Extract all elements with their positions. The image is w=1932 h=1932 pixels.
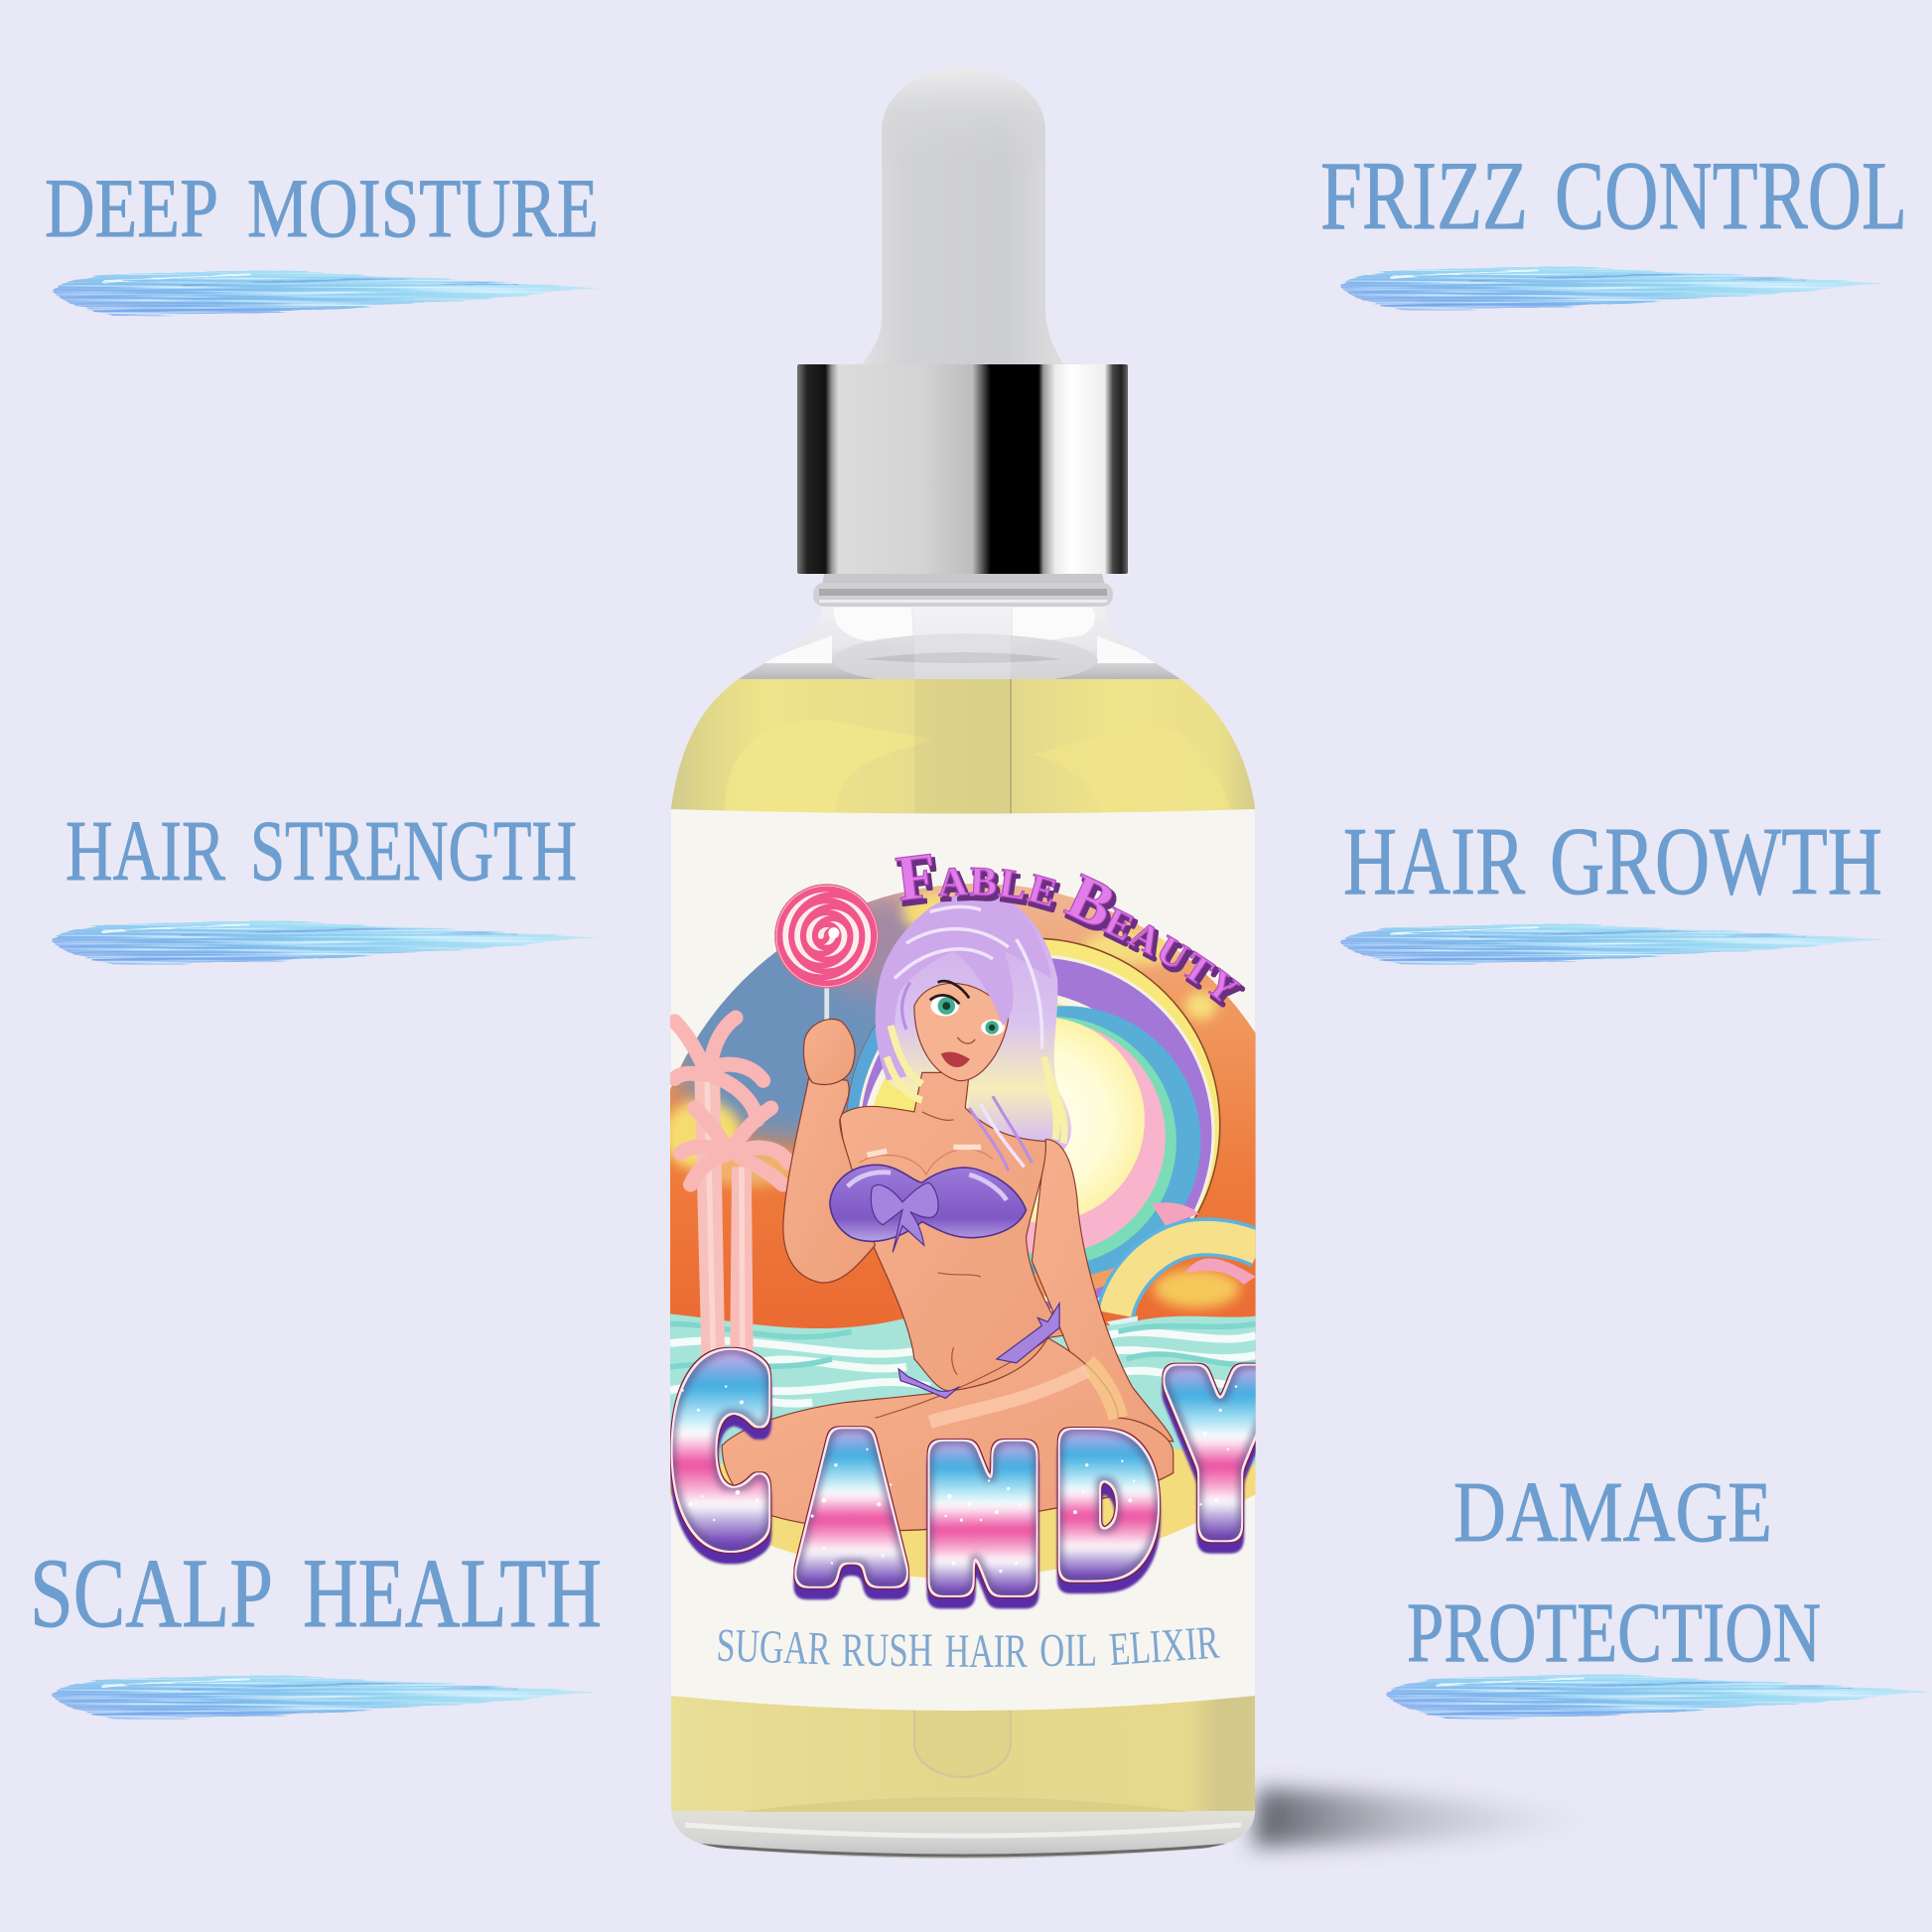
- product name: sugar rush hair oil elixir: HAIR: [945, 1626, 1028, 1678]
- heading: deep moisture: MOISTURE: [247, 162, 599, 255]
- heading: protection: PROTECTION: [1407, 1585, 1821, 1680]
- heading: deep moisture: [45, 162, 599, 255]
- purple bikini bottom: [898, 1304, 1059, 1398]
- face: [914, 983, 1009, 1081]
- bottle label: [670, 809, 1256, 1711]
- eyes and lips: [930, 981, 1005, 1067]
- hair back: [876, 892, 1071, 1182]
- arms torso and legs: [722, 1019, 1173, 1531]
- waves: [670, 1313, 1256, 1480]
- heading: deep moisture: DEEP: [45, 162, 218, 255]
- product name: sugar rush hair oil elixir: [716, 1617, 1221, 1678]
- candy logo lettering: C: [675, 1324, 767, 1586]
- hair bangs: [876, 892, 1051, 1080]
- callout: hair strength: [52, 802, 597, 964]
- heading: hair strength: STRENGTH: [250, 802, 577, 898]
- candy logo lettering: Y: [1173, 1340, 1268, 1574]
- heading: damage: DAMAGE: [1453, 1463, 1772, 1560]
- product name: sugar rush hair oil elixir: RUSH: [842, 1625, 932, 1677]
- lollipop: [775, 885, 879, 1020]
- brush stroke: hair growth: [1340, 924, 1885, 963]
- sand: [670, 1440, 1256, 1579]
- heading: frizz control: FRIZZ: [1320, 142, 1528, 250]
- heading: scalp health: SCALP: [30, 1538, 273, 1648]
- product name: sugar rush hair oil elixir: OIL: [1039, 1625, 1097, 1677]
- heading: hair growth: [1343, 808, 1882, 915]
- heading: scalp health: [30, 1538, 602, 1648]
- label illustration: [670, 854, 1256, 1667]
- purple bikini top: [830, 1165, 1027, 1252]
- product name: sugar rush hair oil elixir: SUGAR: [716, 1620, 832, 1675]
- heading: frizz control: [1320, 142, 1907, 250]
- oil fill: [665, 679, 1261, 1870]
- bottle cast shadow: [1253, 1789, 1601, 1847]
- glass body: [671, 606, 1255, 1859]
- candy logo lettering: D: [1057, 1409, 1156, 1609]
- label paper: [671, 809, 1255, 1711]
- callout: deep moisture: [45, 162, 599, 315]
- heading: hair growth: HAIR: [1343, 808, 1525, 915]
- glitter on candy letters: [681, 1385, 1237, 1573]
- body shading and lines: [860, 1112, 1118, 1422]
- dropper bulb: [862, 69, 1064, 365]
- woman figure: [722, 892, 1173, 1531]
- neck ring: [813, 574, 1113, 607]
- palm trees: [675, 1018, 788, 1371]
- metal collar: [797, 364, 1128, 574]
- candy logo lettering: N: [927, 1421, 1038, 1625]
- brush stroke: frizz control: [1340, 267, 1885, 310]
- product name: sugar rush hair oil elixir: ELIXIR: [1108, 1617, 1221, 1676]
- brush stroke: hair strength: [52, 921, 597, 964]
- candy logo lettering: [675, 1324, 1268, 1625]
- brush stroke: scalp health: [52, 1676, 597, 1719]
- bottle neck and glass shoulder: [735, 606, 1191, 685]
- brush stroke: damage protection: [1386, 1675, 1932, 1718]
- callout: hair growth: [1340, 808, 1885, 963]
- sunset circle: [670, 884, 1256, 1400]
- callout: damage protection: [1386, 1463, 1932, 1718]
- candy logo lettering: A: [804, 1406, 898, 1616]
- heading: hair strength: [66, 802, 577, 898]
- heading: hair strength: HAIR: [66, 802, 225, 898]
- callout: frizz control: [1320, 142, 1907, 310]
- heading: scalp health: HEALTH: [303, 1538, 602, 1648]
- rainbow candy swirl: [847, 938, 1220, 1311]
- product bottle: [670, 69, 1256, 1859]
- brush stroke: deep moisture: [53, 271, 598, 315]
- candy dolphin: [1098, 1202, 1256, 1325]
- callout: scalp health: [30, 1538, 602, 1719]
- brand name: fable beauty: FABLE BEAUTY: [895, 854, 1245, 1008]
